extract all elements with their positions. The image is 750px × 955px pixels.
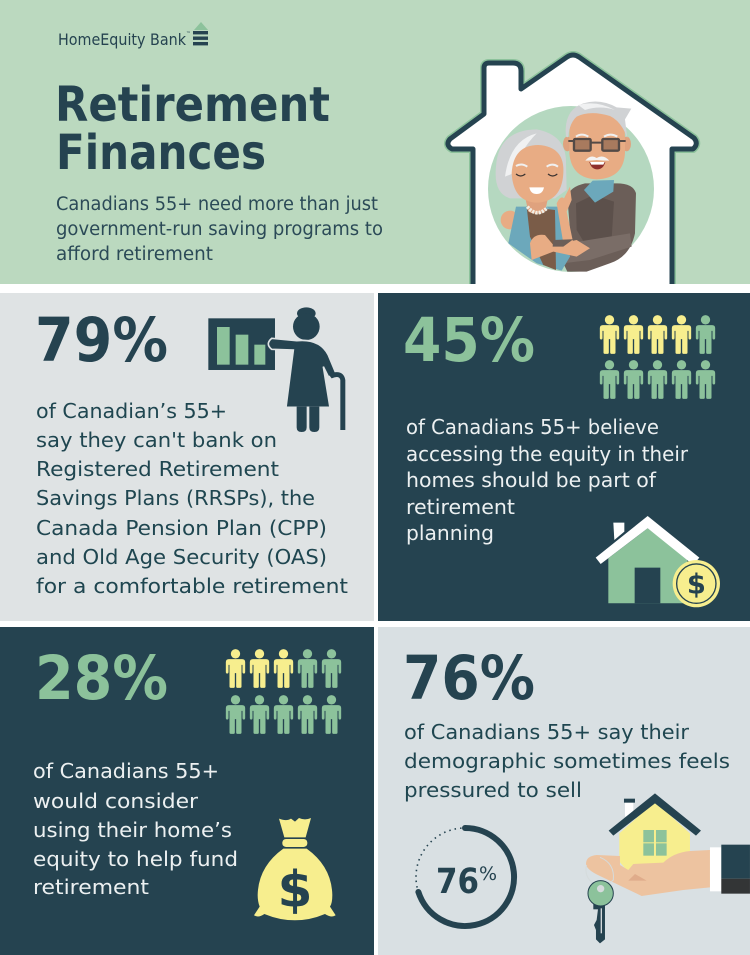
stat: 76%: 76% — [403, 643, 535, 714]
logo: HomeEquity Bank — [58, 22, 208, 49]
illustration: senior man — [563, 102, 636, 272]
stat: 79%: 79% — [35, 305, 168, 376]
text: 79% description: Registered Retirement — [36, 457, 279, 481]
subtitle text: government-run saving programs to — [56, 219, 383, 240]
title — [55, 77, 330, 181]
text: 28% description: retirement — [33, 875, 149, 899]
text: 76% description: of Canadians 55+ say their — [404, 720, 690, 744]
text: 45% description: accessing the equity in their — [406, 442, 689, 466]
subtitle text — [56, 194, 383, 265]
icon: woman pointing at bar chart — [208, 307, 345, 432]
panel: 45% stat — [378, 293, 750, 621]
stat: 45%: 45% — [403, 305, 535, 376]
illustration: senior woman — [496, 129, 590, 271]
icon: 3 of 10 people — [226, 649, 341, 734]
icon: money bag: $ — [278, 861, 312, 919]
text: 79% description: for a comfortable retirement — [36, 574, 348, 598]
text: 79% description: say they can't bank on — [36, 428, 277, 452]
text: 28% description: using their home’s — [33, 818, 232, 842]
chart: 76% progress ring — [416, 828, 514, 926]
panel: 76% stat — [378, 627, 750, 955]
icon: house with dollar coin — [596, 516, 720, 607]
panel: 28% stat — [0, 627, 374, 955]
text: 28% description: would consider — [33, 789, 199, 813]
text: 76% description: demographic sometimes feels — [404, 749, 730, 773]
text: 45% description: homes should be part of — [406, 468, 657, 492]
text: 76% description: pressured to sell — [404, 778, 582, 802]
icon: hand holding house and key — [586, 793, 750, 943]
subtitle text: Canadians 55+ need more than just — [56, 194, 378, 215]
icon: house with dollar coin: $ — [687, 570, 706, 601]
chart: 76% progress ring: % — [479, 863, 497, 885]
text: 45% description — [406, 415, 689, 545]
title: Retirement — [55, 77, 330, 133]
panel: header — [0, 0, 750, 284]
stat: 28%: 28% — [35, 643, 168, 714]
text: 45% description: of Canadians 55+ believe — [406, 415, 659, 439]
text: 79% description: of Canadian’s 55+ — [36, 399, 227, 423]
text: 45% description: retirement — [406, 495, 515, 519]
icon: 4.5 of 10 people — [600, 315, 715, 399]
title: Finances — [56, 125, 266, 181]
text: 79% description: and Old Age Security (OAS) — [36, 545, 327, 569]
illustration: house outline with senior couple — [448, 55, 696, 284]
text: 79% description: Savings Plans (RRSPs), the — [36, 486, 315, 510]
logo: HomeEquity Bank: ™ — [186, 31, 191, 37]
text: 45% description: planning — [406, 521, 494, 545]
text: 28% description — [33, 759, 238, 899]
subtitle text: afford retirement — [56, 244, 213, 265]
panel: 79% stat — [0, 293, 374, 621]
text: 79% description — [36, 399, 348, 598]
icon: money bag — [254, 818, 336, 920]
chart: 76% progress ring: 76 — [436, 862, 479, 902]
text: 76% description — [404, 720, 730, 802]
text: 79% description: Canada Pension Plan (CPP) — [36, 516, 327, 540]
logo: HomeEquity Bank: HomeEquity Bank — [58, 30, 187, 49]
text: 28% description: of Canadians 55+ — [33, 759, 219, 783]
text: 28% description: equity to help fund — [33, 847, 238, 871]
